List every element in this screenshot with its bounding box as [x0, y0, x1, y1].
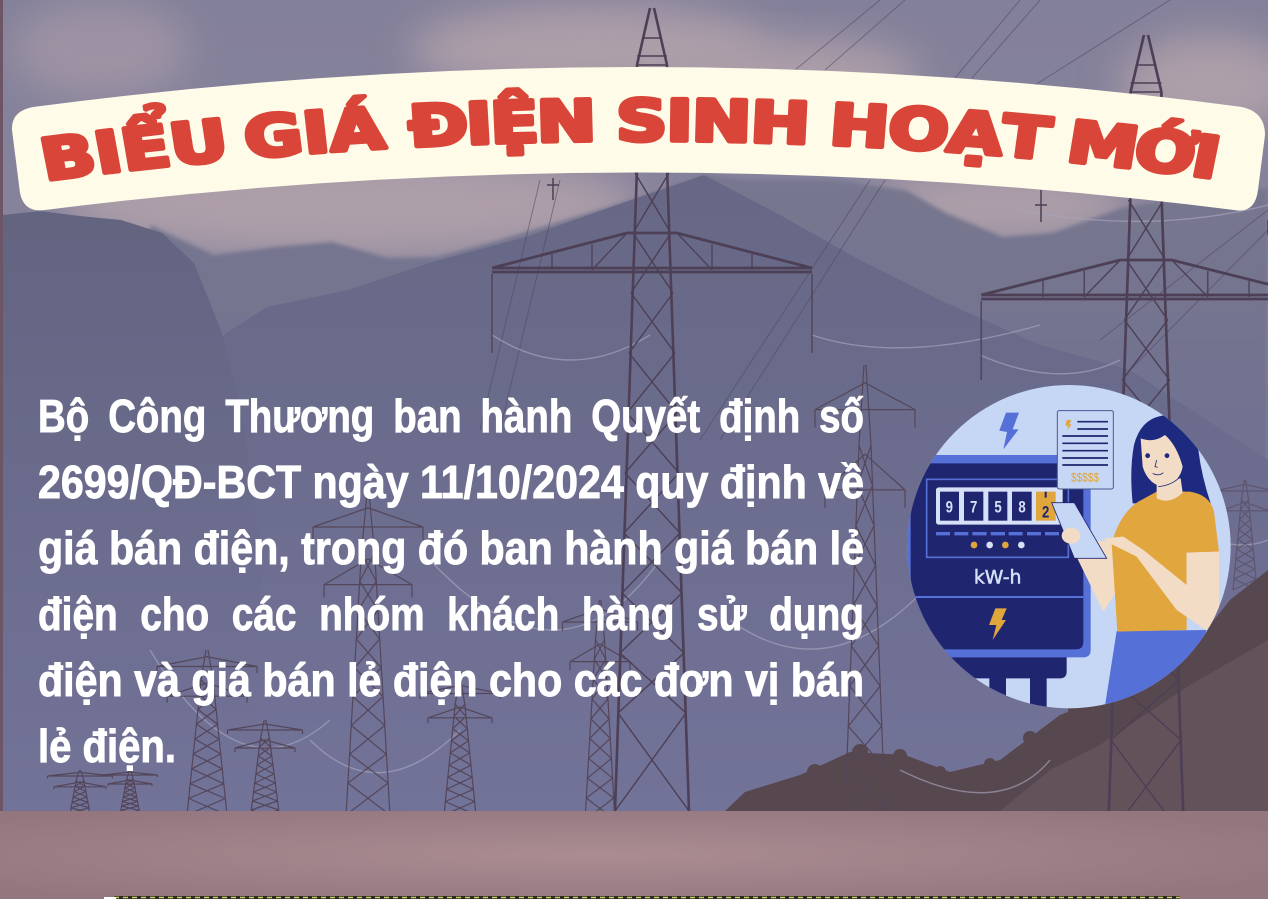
digit cells: [940, 492, 1056, 521]
illustration: woman reading electricity meter: [903, 385, 1231, 717]
title text: BIỂU: [40, 102, 224, 182]
insulators: [547, 178, 1268, 235]
left arm: [1078, 540, 1115, 612]
facial features: [1146, 454, 1181, 487]
title text: SINH: [618, 96, 808, 146]
bill lines: [1062, 422, 1108, 465]
title text: HOẠT: [832, 101, 1056, 168]
display frame: [927, 479, 1068, 557]
icon: orange lightning bolt: [989, 608, 1007, 640]
bill document: [1057, 411, 1113, 489]
back mountain range: [148, 176, 1268, 460]
meter face: [911, 463, 1083, 649]
intro paragraph: [38, 390, 864, 772]
woman: [1052, 415, 1219, 717]
banner shape: [12, 67, 1265, 211]
sagging conductors: [150, 205, 1268, 793]
electricity meter: [903, 455, 1091, 710]
digits: 2: [1042, 502, 1049, 521]
neck and face: [1141, 435, 1183, 501]
clouds: [10, 0, 1268, 257]
small distant pylons: [48, 365, 1268, 830]
intro paragraph: Bộ Công Thương ban hành Quyết định số: [38, 390, 864, 442]
bill amount: $$$$$: [1071, 471, 1099, 485]
sky: [3, 0, 1268, 460]
left hand: [1062, 528, 1080, 544]
right arm pointing at tablet: [1103, 537, 1219, 630]
digit window: [936, 487, 1063, 525]
bottom background band: [0, 811, 1268, 899]
title text: MỚI: [1068, 117, 1220, 180]
dotted border of next panel: [104, 896, 1180, 899]
pants: [1105, 630, 1207, 704]
paper: [1057, 411, 1113, 489]
title text: [40, 87, 1220, 182]
intro paragraph: lẻ điện.: [38, 720, 176, 772]
digits: 9: [946, 497, 953, 516]
intro paragraph: 2699/QĐ-BCT ngày 11/10/2024 quy định về: [38, 456, 864, 508]
intro paragraph: điện cho các nhóm khách hàng sử dụng: [38, 588, 864, 640]
digits: 8: [1018, 497, 1026, 516]
digits: 7: [970, 497, 977, 516]
dashes: [936, 532, 1059, 536]
title text: GIÁ: [244, 94, 389, 159]
meter stand: [947, 653, 1067, 710]
front mountains: [150, 175, 1268, 811]
hair: [1131, 415, 1211, 503]
shirt: [1112, 492, 1219, 632]
intro paragraph: giá bán điện, trong đó ban hành giá bán lẻ: [38, 522, 864, 574]
title banner: [12, 67, 1265, 211]
left edge strip: [0, 0, 3, 811]
meter unit label: kW-h: [974, 567, 1021, 588]
intro paragraph: điện và giá bán lẻ điện cho các đơn vị bán: [38, 654, 864, 706]
digits: 5: [994, 497, 1002, 516]
digits: [946, 492, 1049, 518]
icon: blue lightning bolt: [999, 413, 1019, 449]
main pylon: [492, 8, 812, 811]
divider: [915, 596, 1084, 598]
tablet: [1052, 503, 1107, 558]
power lines: [480, 0, 1268, 440]
right pylon: [981, 35, 1268, 838]
title text: ĐIỆN: [406, 87, 593, 157]
illustration disc: [907, 385, 1231, 708]
tree-covered slope, lower right: [725, 570, 1268, 811]
meter casing: [903, 455, 1091, 657]
left mountain: [3, 211, 223, 811]
icon: small bolt: [1065, 420, 1072, 430]
indicator lights: [971, 542, 1025, 548]
